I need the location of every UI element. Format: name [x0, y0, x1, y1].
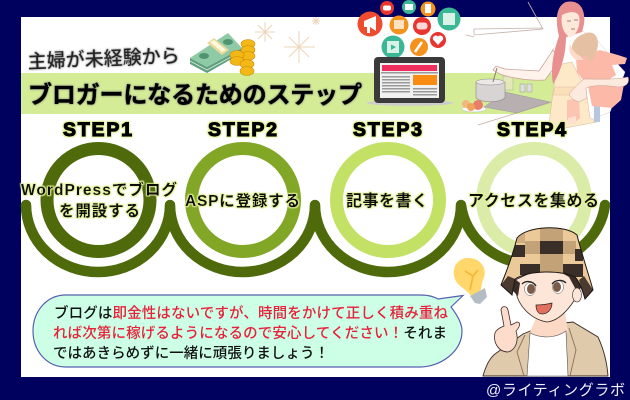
- callout text: [53, 304, 448, 362]
- icon: social media bubbles: [358, 0, 460, 58]
- step 1 label: を開設する: [59, 202, 140, 220]
- illustration: mother cooking with child: [462, 2, 629, 132]
- step 4 ring: [482, 148, 586, 252]
- step 1 label: WordPressでブログ: [21, 180, 177, 199]
- step 2 ring: [192, 148, 294, 252]
- callout text: ではあきらめずに一緒に頑張りましょう！: [53, 345, 329, 362]
- step 3 label: 記事を書く: [346, 191, 428, 210]
- callout bubble: [33, 295, 463, 367]
- lower connecting arcs: [26, 205, 605, 272]
- step 1 ring: [47, 148, 150, 252]
- step 1 label: [21, 180, 177, 220]
- title band: [21, 73, 556, 114]
- icon: light bulb: [454, 258, 487, 304]
- icon: sparkles: [255, 17, 320, 63]
- step 4 heading: STEP4: [497, 119, 566, 141]
- step 4 label: アクセスを集める: [468, 192, 599, 210]
- step 3 ring: [336, 148, 440, 252]
- icon: money and coins: [190, 33, 255, 76]
- step 3 heading: STEP3: [353, 119, 422, 141]
- callout text: れば次第に稼げるようになるので安心してください！それま: [53, 324, 447, 342]
- title: ブロガーになるためのステップ: [28, 81, 362, 109]
- icon: tablet: [367, 57, 453, 106]
- step 1 heading: STEP1: [63, 119, 132, 141]
- step 2 label: ASPに登録する: [185, 191, 300, 210]
- credit: @ライティングラボ: [486, 382, 625, 399]
- step 2 heading: STEP2: [208, 119, 277, 141]
- character: person in checked hat: [483, 225, 608, 376]
- callout text: ブログは即金性はないですが、時間をかけて正しく積み重ね: [54, 304, 448, 322]
- subtitle: 主婦が未経験から: [27, 45, 180, 73]
